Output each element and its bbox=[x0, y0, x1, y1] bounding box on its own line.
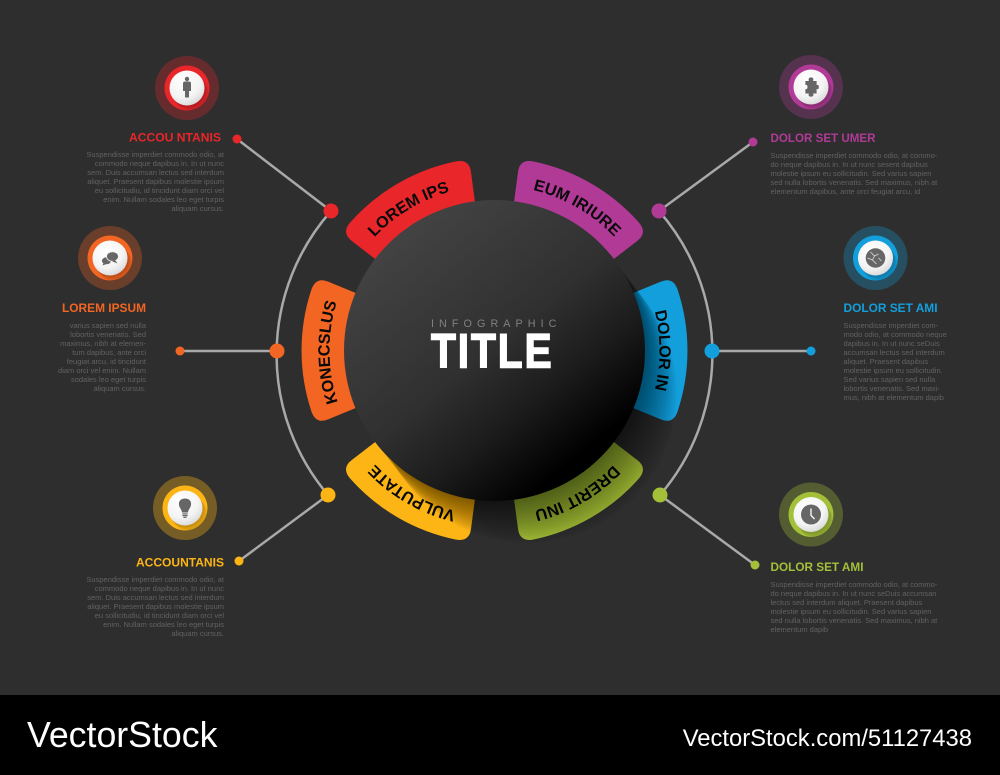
text block: tum dapibus, ante orci bbox=[72, 348, 146, 357]
icon: puzzle piece bbox=[779, 55, 843, 119]
text block: eu sollicitudiu, id tincidunt diam orci vel bbox=[95, 186, 224, 195]
text block: Suspendisse imperdiet commodo odio, at bbox=[86, 575, 225, 584]
segment: KONECSLUS bbox=[302, 280, 356, 421]
panel: dolor set ami blue bbox=[844, 226, 947, 402]
text block: lobortis venenatis. Sed maxi- bbox=[844, 384, 940, 393]
connector: yellow bbox=[234, 488, 336, 566]
text block: commodo neque dapibus in. In ut nunc bbox=[95, 159, 224, 168]
text block: aliquam cursus. bbox=[93, 384, 146, 393]
segment: VULPUTATE: VULPUTATE bbox=[368, 464, 453, 522]
segment: EUM IRIURE bbox=[514, 161, 643, 259]
text block: sodales leo eget turpis bbox=[71, 375, 146, 384]
text block: Suspendisse imperdiet commodo odio, at bbox=[86, 150, 225, 159]
text block: aliquam cursus. bbox=[171, 204, 224, 213]
heading: ACCOU NTANIS bbox=[129, 130, 221, 144]
text block: sem. Duis accumsan lectus sed interdum bbox=[87, 168, 224, 177]
icon: light bulb bbox=[153, 476, 217, 540]
text block: diam orci vel enim. Nullam bbox=[58, 366, 146, 375]
text block: maximus, nibh at elemen- bbox=[60, 339, 146, 348]
heading: DOLOR SET AMI bbox=[844, 301, 938, 315]
connector: purple bbox=[652, 138, 758, 218]
text block: sed nulla lobortis venenatis. Sed maximus, nibh at bbox=[770, 178, 938, 187]
segment: DRERIT INU: DRERIT INU bbox=[536, 466, 620, 522]
segment: VULPUTATE bbox=[346, 442, 475, 540]
heading: DOLOR SET UMER bbox=[770, 131, 876, 145]
text block: modo odio, at commodo neque bbox=[844, 330, 947, 339]
icon: chat bubbles bbox=[78, 226, 142, 290]
text block: aliquet. Praesent dapibus molestie ipsum bbox=[87, 602, 224, 611]
text block: do neque dapibus in. In ut nunc seDuis accumsan bbox=[770, 589, 936, 598]
text block: accumsan lectus sed interdum bbox=[844, 348, 945, 357]
connector: red bbox=[232, 134, 338, 218]
panel: lorem ipsum bbox=[58, 226, 147, 393]
icon: globe bbox=[844, 226, 908, 290]
heading: ACCOUNTANIS bbox=[136, 556, 224, 570]
text block: commodo neque dapibus in. In ut nunc bbox=[95, 584, 224, 593]
text block: do neque dapibus in. In ut nunc sesent dapibus bbox=[770, 160, 928, 169]
footer url: VectorStock.com/51127438 bbox=[683, 725, 972, 752]
text block: feugiat arcu, id tincidunt bbox=[67, 357, 147, 366]
segment: DOLOR IN bbox=[634, 280, 688, 421]
segment: EUM IRIURE: EUM IRIURE bbox=[534, 179, 622, 236]
heading: LOREM IPSUM bbox=[62, 301, 146, 315]
text block: sed nulla lobortis venenatis. Sed maximus, nibh at bbox=[770, 616, 938, 625]
text block: elementum dapibus, ante orci feugiat arcu, id bbox=[770, 187, 920, 196]
title: TITLE bbox=[431, 326, 554, 378]
centre circle bbox=[344, 200, 645, 501]
text block: molestie ipsum eu sollicitudin. Sed varius sapien bbox=[770, 607, 931, 616]
panel: dolor set ami green bbox=[770, 482, 938, 634]
text block: varius sapien sed nulla bbox=[70, 321, 147, 330]
icon: person bbox=[155, 56, 219, 120]
segment: KONECSLUS: KONECSLUS bbox=[318, 300, 338, 404]
text block: enim. Nullam sodales leo eget turpis bbox=[103, 195, 224, 204]
panel: dolor set umer bbox=[770, 55, 938, 196]
heading: DOLOR SET AMI bbox=[770, 560, 864, 574]
panel: accountanis bbox=[86, 476, 225, 638]
text block: elementum dapib bbox=[770, 625, 828, 634]
segment: DOLOR IN: DOLOR IN bbox=[655, 310, 671, 391]
segment: LOREM IPS: LOREM IPS bbox=[367, 182, 448, 236]
text block: molestie ipsum eu sollicitudin. bbox=[844, 366, 943, 375]
connector: green bbox=[652, 488, 760, 570]
text block: enim. Nullam sodales leo eget turpis bbox=[103, 620, 224, 629]
text block: Suspendisse imperdiet com- bbox=[844, 321, 939, 330]
text block: aliquet. Praesent dapibus bbox=[844, 357, 928, 366]
segment: LOREM IPS bbox=[346, 161, 475, 259]
footer logo: VectorStock bbox=[27, 715, 218, 755]
text block: aliquet. Praesent dapibus molestie ipsum bbox=[87, 177, 224, 186]
icon: clock bbox=[779, 482, 843, 546]
long shadow of centre circle bbox=[346, 202, 677, 543]
ring segments bbox=[302, 161, 688, 540]
text block: lobortis venenatis. Sed bbox=[70, 330, 146, 339]
connector: left arc bbox=[277, 211, 331, 495]
text block: sem. Duis accumsan lectus sed interdum bbox=[87, 593, 224, 602]
title block bbox=[431, 318, 562, 378]
panel: accou ntanis bbox=[86, 56, 225, 213]
connector: orange bbox=[176, 344, 284, 358]
text block: dapibus in. In ut nunc seDuis bbox=[844, 339, 940, 348]
footer band bbox=[0, 695, 1000, 775]
text block: Suspendisse imperdiet commodo odio, at commo- bbox=[770, 580, 938, 589]
text block: lectus sed interdum aliquet. Praesent dapibus bbox=[770, 598, 923, 607]
subtitle: INFOGRAPHIC bbox=[431, 318, 562, 330]
text block: Suspendisse imperdiet commodo odio, at commo- bbox=[770, 151, 938, 160]
connector: blue bbox=[704, 344, 816, 358]
text block: eu sollicitudiu, id tincidunt diam orci vel bbox=[95, 611, 224, 620]
segment: DRERIT INU bbox=[514, 442, 643, 540]
text block: molestie ipsum eu sollicitudin. Sed varius sapien bbox=[770, 169, 931, 178]
text block: mus, nibh at elementum dapib bbox=[844, 393, 944, 402]
connector: right arc bbox=[659, 211, 712, 495]
text block: Sed varius sapien sed nulla bbox=[844, 375, 936, 384]
text block: aliquam cursus. bbox=[171, 629, 224, 638]
